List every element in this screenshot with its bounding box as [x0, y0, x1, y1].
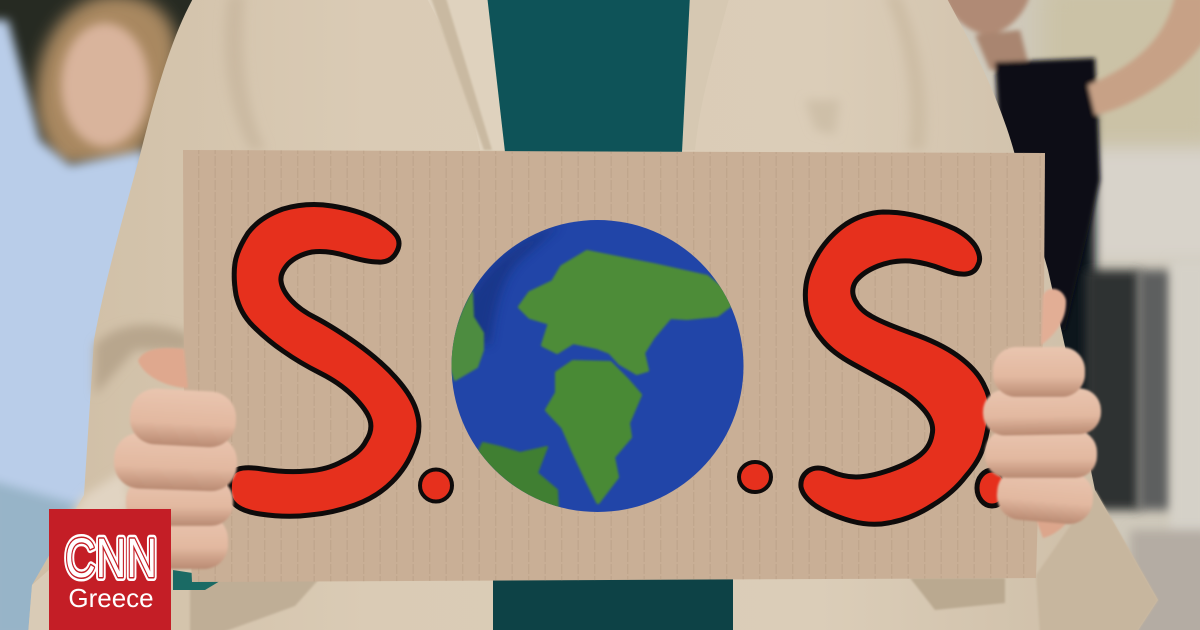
left hand	[113, 348, 238, 569]
final dot	[977, 470, 1007, 506]
coat lower right	[1036, 490, 1158, 630]
cardboard sign	[183, 150, 1045, 582]
teal shirt top	[487, 0, 690, 152]
finger 4	[150, 515, 228, 569]
finger 2	[983, 388, 1101, 436]
coat sleeve shadow left	[95, 325, 190, 395]
continent: Eurasia	[520, 252, 730, 373]
blurred woman at left	[0, 0, 215, 630]
dot after first S	[420, 470, 452, 502]
thumb	[138, 348, 188, 388]
thumb	[1041, 289, 1066, 345]
logo: CNN Greece	[49, 509, 171, 630]
finger 1	[129, 387, 237, 449]
letter: first S	[229, 205, 419, 516]
continent: Africa	[547, 362, 640, 502]
right hand	[983, 289, 1101, 538]
finger 4	[995, 466, 1095, 526]
finger 2	[113, 432, 238, 492]
right background person	[945, 0, 1200, 630]
logo wordmark: CNN	[65, 526, 157, 589]
dot before last S	[739, 462, 771, 492]
teal shirt bottom	[493, 576, 733, 630]
globe	[448, 220, 744, 512]
continent: west	[448, 292, 483, 380]
finger 1	[993, 347, 1085, 397]
logo subtitle: Greece	[68, 583, 154, 613]
finger 3	[985, 430, 1097, 478]
teal cuff	[173, 570, 225, 590]
continent: south	[478, 443, 558, 510]
coat lower left	[190, 578, 320, 630]
coat folds	[224, 0, 266, 150]
logo wordmark: CNN	[65, 526, 157, 589]
logo wordmark: CNN	[65, 526, 157, 589]
finger 3	[126, 478, 233, 526]
letter: second S	[801, 212, 990, 524]
wrist	[1030, 510, 1075, 538]
